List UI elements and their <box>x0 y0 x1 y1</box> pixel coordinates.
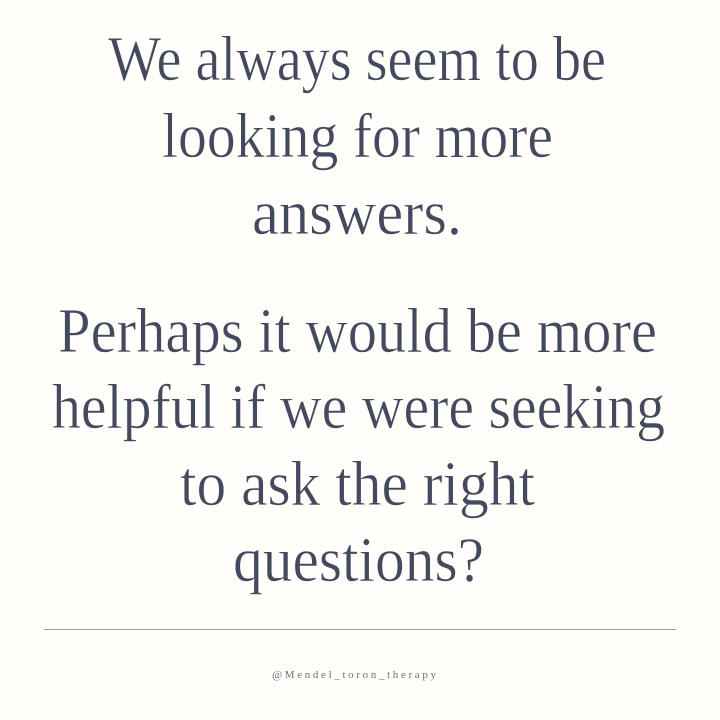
footer handle: @Mendel_toron_therapy <box>272 669 436 681</box>
quote: first statement <box>108 23 606 248</box>
quote: second statement: questions? <box>233 524 484 595</box>
quote: first statement: We always seem to be <box>108 23 606 94</box>
quote: first statement: looking for more <box>162 100 553 171</box>
quote: second statement <box>52 295 665 595</box>
quote: second statement: to ask the right <box>180 448 535 519</box>
divider line <box>44 629 676 630</box>
quote: second statement: helpful if we were seeking <box>52 371 665 442</box>
quote: first statement: answers. <box>252 177 462 248</box>
quote: second statement: Perhaps it would be more <box>58 295 657 366</box>
